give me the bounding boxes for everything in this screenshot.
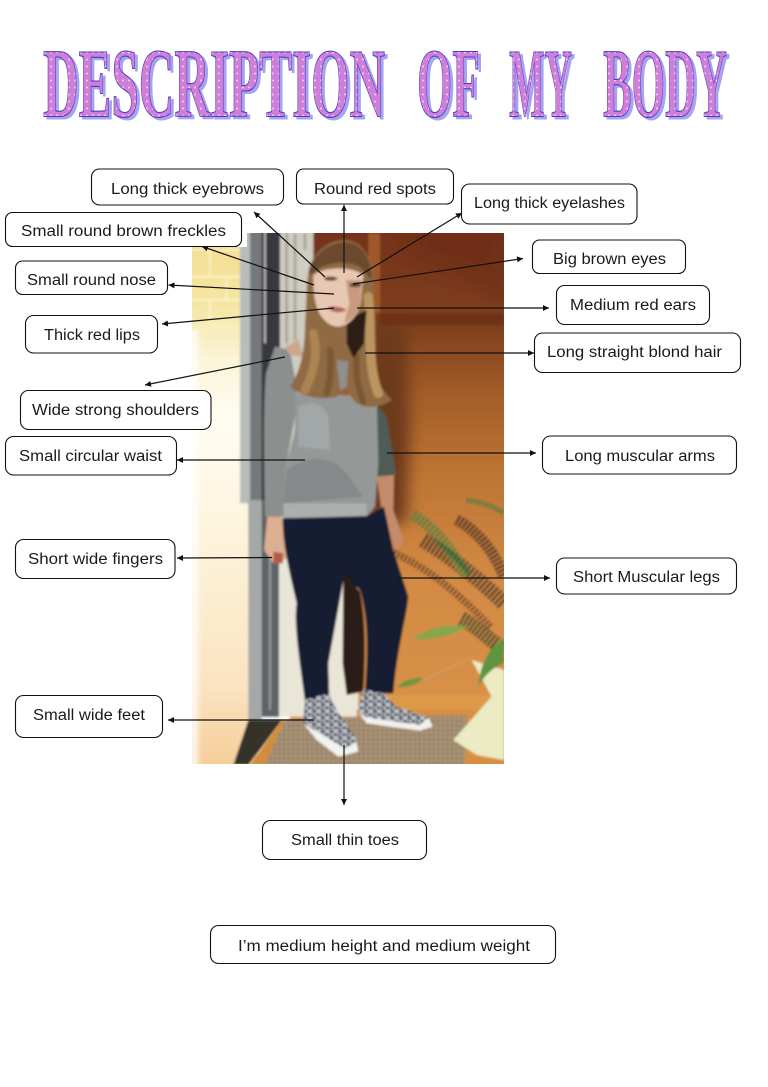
long hair bbox=[290, 240, 392, 407]
floor bbox=[388, 696, 489, 708]
title bbox=[43, 30, 730, 141]
arrow: legs bbox=[397, 577, 550, 579]
label: long muscular arms: Long muscular arms bbox=[565, 448, 715, 465]
hair crown bbox=[308, 242, 372, 280]
label: freckles bbox=[6, 212, 242, 246]
label: small thin toes: Small thin toes bbox=[291, 832, 399, 849]
moulding bbox=[380, 313, 504, 325]
arrow: fingers bbox=[177, 556, 272, 559]
photo of standing girl bbox=[190, 230, 507, 767]
curtain bbox=[278, 233, 316, 458]
right shoe bbox=[358, 689, 433, 730]
left shoe bbox=[302, 692, 358, 748]
label: small circular waist: Small circular waist bbox=[19, 448, 163, 465]
arrow: nose bbox=[168, 285, 334, 294]
plant bbox=[387, 501, 504, 687]
label: long thick eyebrows: Long thick eyebrows bbox=[111, 181, 264, 198]
wall shadow bbox=[363, 323, 410, 523]
arrow: freckles bbox=[202, 246, 314, 285]
label: small thin toes bbox=[262, 820, 426, 860]
label: long thick eyelashes bbox=[462, 184, 637, 224]
arrow: ears bbox=[357, 307, 549, 309]
sweater torso bbox=[283, 393, 378, 519]
sweater neckline bbox=[337, 360, 348, 390]
title lettering: DESCRIPTION bbox=[43, 30, 385, 138]
label: small circular waist bbox=[6, 436, 176, 475]
shoulder skin bbox=[285, 339, 303, 357]
label: long straight blond hair: Long straight blond hair bbox=[547, 344, 722, 361]
shadow between legs bbox=[343, 572, 365, 695]
wall top left strip bbox=[368, 233, 380, 313]
left arm bbox=[264, 347, 298, 517]
arrow: eyebrows bbox=[254, 212, 325, 277]
wall bbox=[290, 230, 507, 767]
label: wide strong shoulders bbox=[20, 390, 211, 430]
label: height and weight bbox=[210, 926, 556, 964]
label: thick red lips: Thick red lips bbox=[44, 327, 140, 344]
arrow: spots bbox=[343, 205, 345, 273]
label: small round nose: Small round nose bbox=[27, 272, 156, 289]
arrow: arms bbox=[387, 452, 536, 454]
bag bbox=[453, 660, 504, 760]
title lettering: MY bbox=[509, 30, 572, 138]
label: round red spots bbox=[296, 169, 454, 204]
white gap above window bbox=[192, 232, 247, 247]
title shadow: OF bbox=[420, 32, 483, 141]
label: freckles: Small round brown freckles bbox=[21, 223, 226, 240]
label: medium red ears bbox=[556, 286, 710, 324]
label: small wide feet bbox=[16, 696, 162, 738]
window background bbox=[190, 230, 257, 767]
title shadow: MY bbox=[512, 32, 575, 141]
label: long muscular arms bbox=[542, 436, 736, 474]
arrow: hair bbox=[365, 352, 534, 354]
label: height and weight: I’m medium height and medium weight bbox=[238, 938, 531, 955]
label: long thick eyelashes: Long thick eyelashes bbox=[474, 195, 625, 212]
dark hair beside neck bbox=[347, 310, 367, 358]
label: short muscular legs: Short Muscular legs bbox=[573, 569, 720, 586]
label: short muscular legs bbox=[556, 558, 736, 594]
arrow: waist bbox=[177, 459, 305, 461]
right arm bbox=[375, 403, 396, 478]
label: short wide fingers bbox=[16, 540, 175, 578]
window frame bbox=[240, 230, 250, 503]
arrow: eyes bbox=[353, 258, 523, 284]
label: round red spots: Round red spots bbox=[314, 181, 436, 198]
label: big brown eyes bbox=[532, 240, 686, 274]
arrow: eyelashes bbox=[357, 213, 462, 277]
label: thick red lips bbox=[26, 316, 158, 353]
jeans bbox=[283, 507, 408, 702]
title shadow: DESCRIPTION bbox=[46, 32, 388, 141]
face bbox=[313, 268, 363, 327]
title lettering: OF bbox=[417, 30, 480, 138]
label: wide strong shoulders: Wide strong shoulders bbox=[32, 402, 199, 419]
arrow: feet bbox=[168, 719, 314, 721]
label: short wide fingers: Short wide fingers bbox=[28, 551, 163, 568]
eyes and mouth bbox=[324, 277, 337, 281]
label: long straight blond hair bbox=[534, 333, 740, 372]
hair streaks bbox=[305, 297, 378, 402]
arrow: shoulders bbox=[145, 357, 285, 385]
label: big brown eyes: Big brown eyes bbox=[553, 251, 666, 268]
label: long thick eyebrows bbox=[92, 169, 284, 205]
label: medium red ears: Medium red ears bbox=[570, 297, 696, 314]
label: small round nose bbox=[16, 261, 168, 294]
label: small wide feet: Small wide feet bbox=[33, 707, 146, 724]
arrow: lips bbox=[162, 308, 334, 324]
left hand bbox=[264, 517, 287, 563]
brick lines bbox=[192, 250, 240, 327]
arrow: toes bbox=[343, 745, 345, 805]
